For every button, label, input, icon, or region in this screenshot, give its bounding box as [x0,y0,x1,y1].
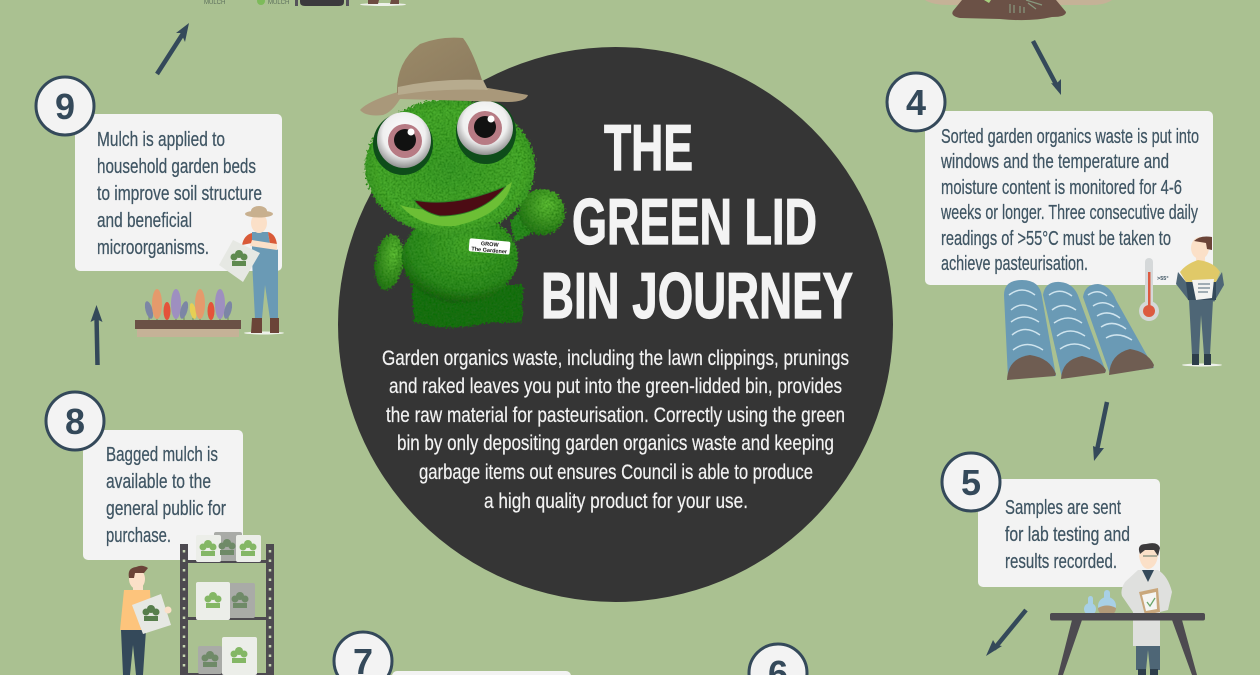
intro text: garbage items out ensures Council is able to produce [419,460,813,484]
step 8 text [106,443,226,547]
step 4 text [940,125,1199,275]
intro text: and raked leaves you put into the green-lidded bin, provides [389,374,842,398]
intro text: Garden organics waste, including the lawn clippings, prunings [382,346,849,370]
icon: gardener with mulch bag [219,206,284,334]
step 4 text: achieve pasteurisation. [941,252,1088,275]
icon: garden bed with plants [135,289,241,337]
step 9 text: microorganisms. [97,236,209,259]
step 4 badge [887,73,945,131]
arrow: step 5 to step 6 [986,610,1026,656]
arrow: step 4 to step 5 [1093,402,1107,461]
mascot name badge: The Gardener [471,246,508,256]
icon: covered compost windrows [1004,280,1154,380]
step 8 badge [46,392,104,450]
step 5 text: results recorded. [1005,550,1117,573]
mascot name badge [468,238,511,256]
central dark circle [338,47,893,602]
intro text [382,346,849,513]
step 9 badge: 9 [55,86,75,127]
top-left cropped illustration: MULCH [268,0,289,6]
step 5 text: for lab testing and [1005,523,1130,546]
panel: step 5 [942,453,1205,675]
icon: person holding mulch bag [120,566,172,675]
panel: step 8 [46,392,274,675]
intro text: the raw material for pasteurisation. Correctly using the green [386,403,845,427]
step 4 text: windows and the temperature and [940,150,1169,173]
step 8 text: general public for [106,497,226,520]
step 9 text: and beneficial [97,209,192,232]
top-left cropped illustration [204,0,406,6]
step 8 badge: 8 [65,401,85,442]
icon: thermometer [1139,258,1169,321]
arrow: step 8 to step 9 [90,305,102,365]
step 9 text: household garden beds [97,155,256,178]
step 5 badge: 5 [961,462,981,503]
step 5 text [1005,496,1130,573]
step 5 text: Samples are sent [1005,496,1121,519]
step 4 text: readings of >55°C must be taken to [941,227,1171,250]
title: BIN JOURNEY [541,259,853,332]
top-left cropped illustration: MULCH [204,0,225,6]
intro text: a high quality product for your use. [484,489,748,513]
panel: step 7 [334,632,571,675]
step 8 text: available to the [106,470,211,493]
icon: thermometer: >55° [1157,276,1169,282]
top-right cropped compost mound [925,0,1112,20]
mascot hat [360,38,528,115]
arrow: step 9 to step 10 [157,23,189,74]
title [541,111,853,332]
step 6 badge [749,644,807,675]
icon: scientist with clipboard at lab table [1050,543,1205,675]
step 9 badge [36,77,94,135]
step 9 text: to improve soil structure [97,182,262,205]
step 5 badge [942,453,1000,511]
step 7 badge [334,632,392,675]
arrow: step 3 to step 4 [1033,41,1061,95]
panel: step 4 [887,73,1224,380]
intro text: bin by only depositing garden organics waste and keeping [397,431,834,455]
mascot name badge: GROW [481,241,500,249]
step 9 text: Mulch is applied to [97,128,225,151]
step 8 text: Bagged mulch is [106,443,218,466]
step 4 badge: 4 [906,82,926,123]
step 9 text [97,128,262,259]
icon: shelf of mulch bags [180,532,274,675]
panel: step 9 [36,77,284,337]
icon: person with clipboard [1176,236,1224,366]
step 8 text: purchase. [106,524,171,547]
mascot: green furry gardener [360,38,565,327]
title: GREEN LID [572,185,817,258]
title: THE [604,111,693,184]
